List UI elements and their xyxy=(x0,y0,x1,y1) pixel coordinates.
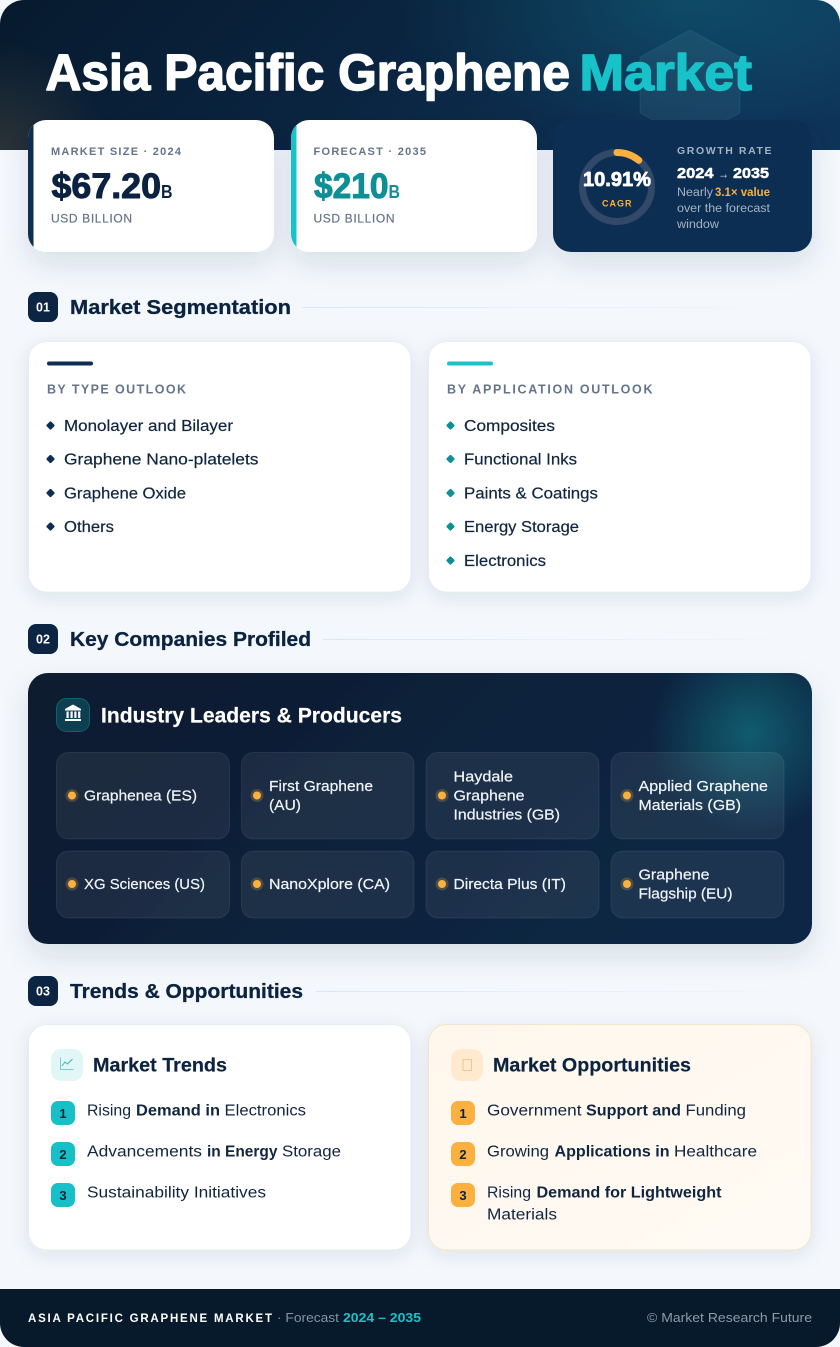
section heading 01: 01 xyxy=(36,300,50,314)
trend 2: Storage xyxy=(282,1144,341,1160)
CAGR ring gauge xyxy=(582,152,652,222)
company card: XG Sciences xyxy=(56,851,230,918)
title: Market xyxy=(580,44,752,101)
company card: Applied Graphene xyxy=(611,752,784,839)
list: type items: Monolayer and Bilayer xyxy=(64,418,233,435)
icon: line chart xyxy=(51,1049,83,1081)
company card: First Graphene: First Graphene xyxy=(269,779,373,795)
panel: by type outlook xyxy=(28,342,411,592)
stat card: growth rate: → xyxy=(718,166,729,182)
company card: Applied Graphene: Applied Graphene xyxy=(638,779,768,795)
stat card: market size 2024 xyxy=(28,120,274,252)
stat card: forecast 2035: FORECAST · 2035 xyxy=(314,146,426,158)
stat card: growth rate: GROWTH RATE xyxy=(677,145,772,157)
opportunity 3: Materials xyxy=(487,1206,557,1224)
opportunity 3 xyxy=(451,1183,722,1224)
stat card: forecast 2035: B xyxy=(388,182,400,202)
stat card: forecast 2035: USD BILLION xyxy=(314,212,394,226)
company card: First Graphene: (AU) xyxy=(269,798,301,814)
stat card: market size 2024: $67.20 xyxy=(52,167,161,206)
stat card: market size 2024: B xyxy=(161,182,172,202)
opportunity 1: 1 xyxy=(459,1106,467,1121)
trend 1: Rising xyxy=(87,1102,131,1120)
panel: market trends xyxy=(28,1024,411,1250)
company card: First Graphene xyxy=(242,752,414,839)
stat card: market size 2024: USD BILLION xyxy=(51,212,132,226)
section heading 03 xyxy=(28,976,812,1006)
trend 1: 1 xyxy=(59,1106,67,1121)
section heading 03: Trends & Opportunities xyxy=(70,980,303,1003)
trend 3: Sustainability Initiatives xyxy=(87,1184,266,1202)
trend 3 xyxy=(51,1183,266,1207)
list: type items xyxy=(46,418,259,536)
CAGR ring gauge: 10.91% xyxy=(583,169,651,191)
opportunity 3: Demand for Lightweight xyxy=(536,1184,722,1202)
stat card: growth rate: Nearly xyxy=(677,187,713,199)
company card: Haydale: Haydale xyxy=(454,770,513,786)
panel heading: Market Opportunities xyxy=(493,1054,691,1076)
list: type items: Others xyxy=(64,519,114,536)
list: application items: Composites xyxy=(464,418,555,435)
stat card: forecast 2035: $210 xyxy=(314,167,388,206)
footer bar: ASIA PACIFIC GRAPHENE MARKET xyxy=(28,1313,272,1325)
panel: by application outlook: BY APPLICATION OUTLOOK xyxy=(447,382,652,396)
icon: bank building xyxy=(56,698,90,732)
panel heading: Market Trends xyxy=(93,1054,227,1076)
list: application items: Electronics xyxy=(464,553,546,570)
company card: Graphene Flagship: Flagship (EU) xyxy=(638,886,732,902)
opportunity 2: Healthcare xyxy=(674,1144,757,1160)
footer bar xyxy=(0,1289,840,1347)
list: application items: Functional Inks xyxy=(464,452,577,468)
opportunity 1 xyxy=(451,1101,746,1125)
stat card: growth rate: window xyxy=(676,219,720,231)
trend 2: Advancements xyxy=(87,1144,202,1160)
company card: XG Sciences: XG Sciences (US) xyxy=(84,877,205,893)
company card: Graphene Flagship: Graphene xyxy=(638,868,710,884)
list: application items: Paints & Coatings xyxy=(464,486,598,502)
company card: Haydale: Graphene xyxy=(454,788,524,804)
section heading 01: Market Segmentation xyxy=(70,296,291,319)
company card: Directa Plus: Directa Plus (IT) xyxy=(454,877,566,893)
section heading 03: 03 xyxy=(36,984,50,998)
stat card: market size 2024: MARKET SIZE · 2024 xyxy=(51,146,182,158)
opportunity 2: Applications in xyxy=(554,1144,670,1160)
company card: Haydale: Industries (GB) xyxy=(454,808,560,824)
icon: missing glyph box xyxy=(451,1049,483,1081)
footer bar: 2024 – 2035 xyxy=(343,1311,421,1325)
stat card: growth rate: 3.1× value xyxy=(715,187,770,199)
company card: Directa Plus xyxy=(426,851,599,918)
section heading 02: 02 xyxy=(36,632,50,646)
panel heading: Industry Leaders & Producers xyxy=(101,704,402,728)
stat card: growth rate: 2035 xyxy=(733,165,769,182)
panel: by application outlook xyxy=(428,342,811,592)
stat card: forecast 2035 xyxy=(291,120,537,252)
company card: Graphenea xyxy=(56,752,230,839)
section heading 02 xyxy=(28,624,812,654)
footer bar: © Market Research Future xyxy=(647,1311,812,1325)
stat card: growth rate: over the forecast xyxy=(677,203,771,215)
section heading 02: Key Companies Profiled xyxy=(70,628,311,651)
title: Asia Pacific Graphene xyxy=(46,44,570,101)
footer bar: · Forecast xyxy=(277,1311,340,1325)
opportunity 3: Rising xyxy=(487,1184,531,1202)
company card: NanoXplore: NanoXplore (CA) xyxy=(269,877,390,893)
company card: Applied Graphene: Materials (GB) xyxy=(638,798,741,814)
trend 1 xyxy=(51,1101,306,1125)
trend 1: Electronics xyxy=(224,1102,306,1120)
opportunity 3: 3 xyxy=(459,1188,467,1203)
section heading 01 xyxy=(28,292,812,322)
opportunity 1: Funding xyxy=(686,1102,746,1120)
opportunity 2: 2 xyxy=(459,1147,467,1162)
header banner xyxy=(0,0,840,150)
panel: by type outlook: BY TYPE OUTLOOK xyxy=(47,382,186,396)
trend 2: in Energy xyxy=(207,1144,278,1160)
opportunity 2: Growing xyxy=(487,1144,549,1160)
CAGR ring gauge: CAGR xyxy=(602,198,632,208)
trend 3: 3 xyxy=(59,1188,67,1203)
opportunity 2 xyxy=(451,1142,757,1166)
trend 1: Demand in xyxy=(136,1102,220,1120)
panel: industry leaders and producers xyxy=(28,673,812,944)
list: application items: Energy Storage xyxy=(464,519,579,536)
company card: Graphene Flagship xyxy=(611,851,784,918)
list: type items: Graphene Nano-platelets xyxy=(64,452,259,468)
company card: NanoXplore xyxy=(242,851,414,918)
list: type items: Graphene Oxide xyxy=(64,486,186,502)
stat card: growth rate: 2024 xyxy=(677,165,714,182)
stat card: growth rate xyxy=(553,120,812,252)
list: application items xyxy=(446,418,598,570)
trend 2: 2 xyxy=(59,1147,67,1162)
trend 2 xyxy=(51,1142,341,1166)
panel: market opportunities xyxy=(428,1024,811,1250)
opportunity 1: Support and xyxy=(586,1102,681,1120)
company card: Graphenea: Graphenea (ES) xyxy=(84,788,197,804)
company card: Haydale xyxy=(426,752,599,839)
opportunity 1: Government xyxy=(487,1102,582,1120)
